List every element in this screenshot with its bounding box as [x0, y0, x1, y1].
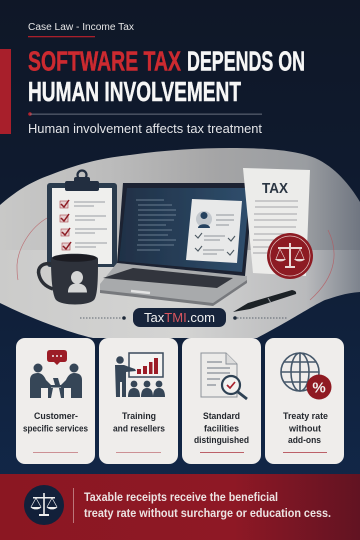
card: training and resellers	[99, 338, 178, 464]
laptop	[100, 183, 253, 306]
title	[28, 46, 305, 107]
kicker label: Case Law - Income Tax	[28, 22, 134, 33]
tax document	[243, 168, 310, 276]
icon: document with magnifier	[201, 353, 247, 399]
label: add-ons	[288, 435, 321, 446]
icon: globe with percent: %	[312, 380, 326, 396]
label: Training	[122, 411, 156, 422]
subtitle: Human involvement affects tax treatment	[28, 122, 263, 136]
tax document: TAX	[262, 181, 288, 197]
takeaway text: Taxable receipts receive the beneficial	[84, 492, 278, 504]
label: specific services	[23, 424, 88, 434]
card: customer-specific services	[16, 338, 95, 464]
title: HUMAN INVOLVEMENT	[28, 76, 241, 107]
title divider	[28, 112, 262, 116]
label: distinguished	[194, 435, 249, 446]
clipboard	[47, 170, 117, 267]
TaxTMI brand badge	[133, 308, 226, 327]
label	[283, 411, 328, 446]
takeaway text	[84, 492, 331, 520]
icon: meeting	[30, 350, 82, 398]
illustration scene	[0, 140, 360, 345]
title: SOFTWARE TAX	[28, 46, 181, 76]
label: without	[288, 424, 322, 434]
pen	[233, 290, 296, 312]
card: treaty rate without add-ons	[265, 338, 344, 464]
label: Treaty rate	[283, 411, 328, 422]
label: and resellers	[113, 424, 165, 434]
dotted connectors	[80, 316, 287, 320]
brushed backdrop	[0, 140, 360, 345]
mug	[39, 254, 98, 304]
red side accent bar	[0, 49, 11, 134]
icon: presenter and chart	[115, 353, 165, 397]
kicker underline	[28, 36, 95, 37]
header	[0, 22, 305, 136]
label: Standard	[203, 411, 240, 422]
takeaway text: treaty rate without surcharge or education cess.	[84, 508, 331, 520]
card row	[16, 338, 344, 464]
label	[113, 411, 165, 434]
label	[23, 411, 88, 434]
thin red arcs	[17, 218, 334, 300]
icon: scales in circle	[24, 485, 64, 525]
lid	[117, 183, 253, 276]
label: facilities	[204, 424, 239, 434]
base	[100, 263, 247, 305]
card: standard facilities distinguished	[182, 338, 261, 464]
red scales seal	[267, 233, 313, 279]
footer banner	[0, 474, 360, 540]
label: Customer-	[34, 411, 78, 422]
label	[194, 411, 249, 446]
TaxTMI brand badge: TaxTMI.com	[144, 311, 215, 325]
divider	[72, 488, 75, 523]
